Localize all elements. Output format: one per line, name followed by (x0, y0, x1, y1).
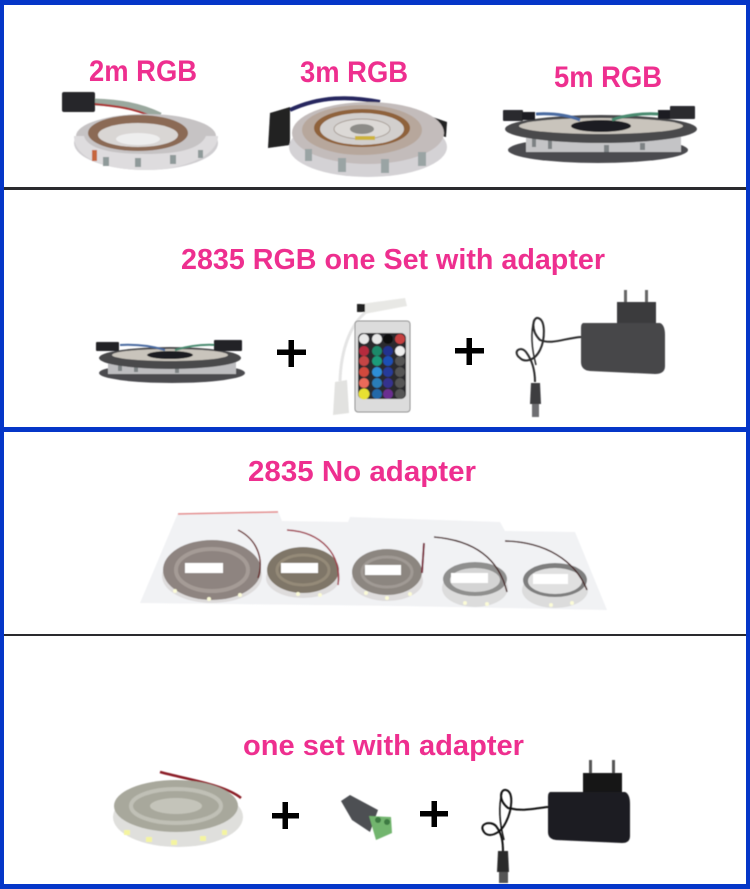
panel: RGB strip lengths (62, 55, 697, 177)
icon: plus (455, 338, 484, 365)
coil 2 (266, 530, 340, 598)
photo: 3m RGB strip coil (268, 98, 447, 177)
coil 5 (505, 541, 588, 608)
coil 3 (351, 543, 424, 601)
photo: RGB controller and IR remote (333, 298, 410, 415)
photo: 2m RGB strip coil (62, 92, 218, 170)
photo: power adapter (517, 290, 665, 417)
panel: 2835 RGB one set with adapter (96, 244, 665, 417)
divider: black line (4, 634, 746, 636)
plastic bags (140, 511, 607, 610)
photo: 5m RGB strip on spool (503, 106, 697, 163)
panel: one set with adapter (113, 730, 630, 883)
divider: black line (4, 187, 746, 190)
photo: RGB spool (96, 340, 245, 383)
heading: 5m RGB: 5m RGB (554, 61, 662, 94)
photo: power adapter (482, 760, 630, 883)
coil 1 (162, 530, 262, 603)
remote buttons (358, 334, 405, 400)
heading: one set with adapter (243, 730, 524, 762)
heading: 2m RGB: 2m RGB (89, 55, 197, 88)
photo: DC connector (341, 795, 392, 840)
panel: 2835 no adapter (140, 456, 607, 610)
heading: 3m RGB: 3m RGB (300, 56, 408, 89)
coil 4 (434, 537, 508, 607)
icon: plus (420, 801, 448, 827)
heading: 2835 RGB one Set with adapter (181, 244, 605, 276)
icon: plus (272, 802, 299, 829)
heading: 2835 No adapter (248, 456, 476, 488)
icon: plus (277, 340, 306, 367)
photo: five bagged strip coils (140, 511, 607, 610)
divider: blue line (0, 427, 750, 432)
photo: white strip coil (113, 772, 243, 847)
